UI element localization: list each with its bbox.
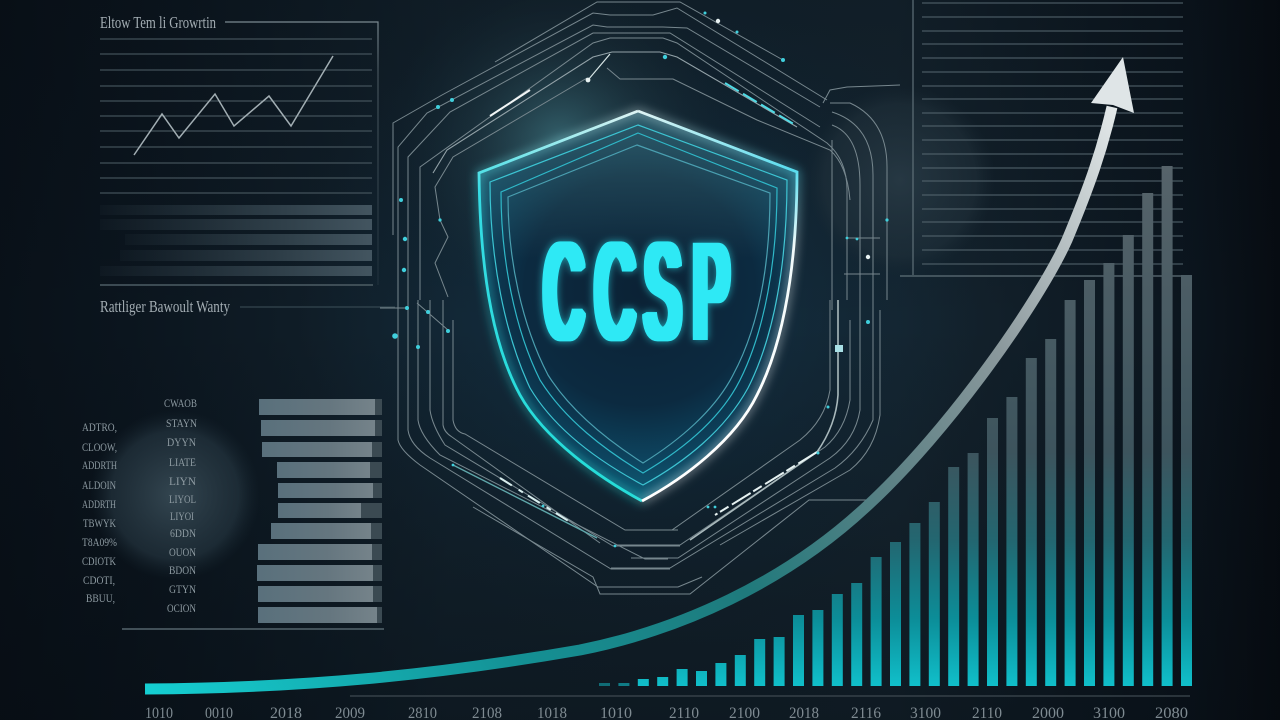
middle labels: LIYOL bbox=[169, 492, 196, 506]
glow orb bbox=[90, 410, 260, 580]
bright top traces bbox=[433, 52, 797, 173]
top circuit lines bbox=[380, 2, 900, 330]
baseline bbox=[122, 628, 384, 630]
left labels: ADTRO, bbox=[82, 420, 117, 434]
left labels: TBWYK bbox=[83, 516, 116, 530]
left labels: ADDRTH bbox=[82, 458, 117, 472]
shield title: CCSP bbox=[544, 216, 729, 369]
icon: shield with CCSP bbox=[479, 111, 797, 501]
lower circuit lines bbox=[398, 290, 880, 594]
left labels: BBUU, bbox=[86, 591, 115, 605]
middle labels: OCION bbox=[167, 601, 196, 615]
bar sides bbox=[361, 399, 382, 623]
middle labels: DYYN bbox=[167, 435, 196, 449]
frame bbox=[900, 0, 1185, 276]
left labels: CDIOTK bbox=[82, 554, 116, 568]
left labels: ADDRTH bbox=[82, 497, 116, 511]
panel: top-left line chart bbox=[100, 13, 378, 285]
circuit frame around shield bbox=[380, 2, 900, 594]
shield outer edge right bbox=[638, 111, 797, 501]
arrow head bbox=[1091, 57, 1134, 113]
middle labels: BDON bbox=[169, 563, 196, 577]
heading: second panel: Rattliger Bawoult Wanty bbox=[100, 297, 230, 316]
middle labels: STAYN bbox=[166, 416, 197, 430]
panel: top-right striped chart bbox=[900, 0, 1185, 276]
middle labels: LIATE bbox=[169, 455, 196, 469]
heading: growth chart: Eltow Tem li Growrtin bbox=[100, 13, 216, 32]
panel frame bbox=[225, 22, 378, 285]
left labels: CLOOW, bbox=[82, 440, 117, 454]
middle labels: CWAOB bbox=[164, 396, 197, 410]
bright lower traces bbox=[690, 300, 838, 540]
left labels: CDOTI, bbox=[83, 573, 115, 587]
middle labels: LIYN bbox=[169, 474, 196, 488]
chart grid lines bbox=[100, 39, 372, 193]
middle labels: 6DDN bbox=[170, 526, 196, 540]
middle labels bbox=[164, 396, 197, 615]
sparkline bbox=[134, 56, 333, 155]
left labels: T8A09% bbox=[82, 535, 117, 549]
circuit nodes bbox=[392, 12, 889, 547]
left labels bbox=[82, 420, 117, 605]
middle labels: LIYOI bbox=[170, 509, 194, 523]
bar fronts bbox=[257, 399, 377, 623]
shield body bbox=[479, 111, 797, 501]
shield outer edge left bbox=[479, 111, 642, 501]
left labels: ALDOIN bbox=[82, 478, 116, 492]
chart base line bbox=[100, 284, 373, 286]
grid lines bbox=[922, 3, 1183, 264]
fading bands bbox=[100, 205, 372, 276]
x axis bbox=[145, 696, 1190, 720]
panel: horizontal bar chart bbox=[82, 396, 384, 629]
bar chart: growth columns bbox=[599, 166, 1192, 686]
middle labels: OUON bbox=[169, 545, 196, 559]
axis labels bbox=[145, 705, 1188, 720]
arrow: growth curve bbox=[145, 57, 1134, 689]
middle labels: GTYN bbox=[169, 582, 196, 596]
inner shield rings bbox=[490, 125, 787, 485]
